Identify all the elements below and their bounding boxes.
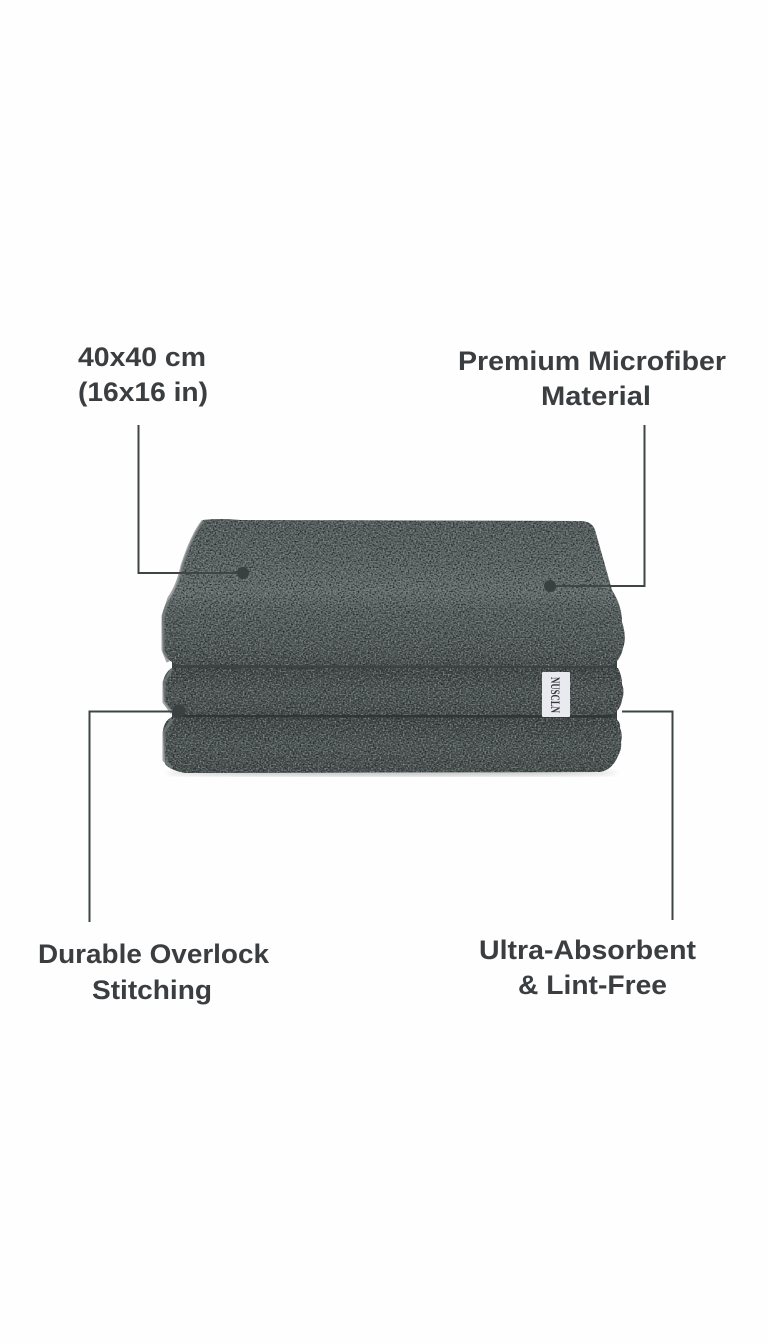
callout: absorbency: & Lint-Free [518, 970, 667, 1000]
size label: 40x40 cm [78, 342, 206, 372]
stack crease [178, 715, 612, 718]
stitching label: Durable Overlock [38, 939, 270, 969]
size leader line [138, 425, 243, 573]
woven label [542, 672, 570, 717]
material leader line [550, 425, 644, 586]
woven label: NUSCLN [548, 677, 563, 713]
bottom towel [163, 717, 622, 773]
callout: material [458, 346, 727, 592]
callout: stitching: Stitching [92, 975, 212, 1005]
middle towel [163, 668, 624, 715]
callout: absorbency [479, 712, 696, 1000]
material label: Premium Microfiber [458, 346, 727, 376]
callout: stitching [38, 704, 270, 1005]
callout: size [78, 342, 249, 579]
callout: material: Material [541, 381, 651, 411]
absorbency label: Ultra-Absorbent [479, 935, 696, 965]
towel stack [162, 519, 625, 776]
top towel [162, 519, 625, 666]
callout: size: (16x16 in) [78, 377, 208, 407]
overlock edge [163, 521, 203, 662]
stitching leader line [90, 712, 179, 922]
absorbency leader line [622, 712, 672, 920]
